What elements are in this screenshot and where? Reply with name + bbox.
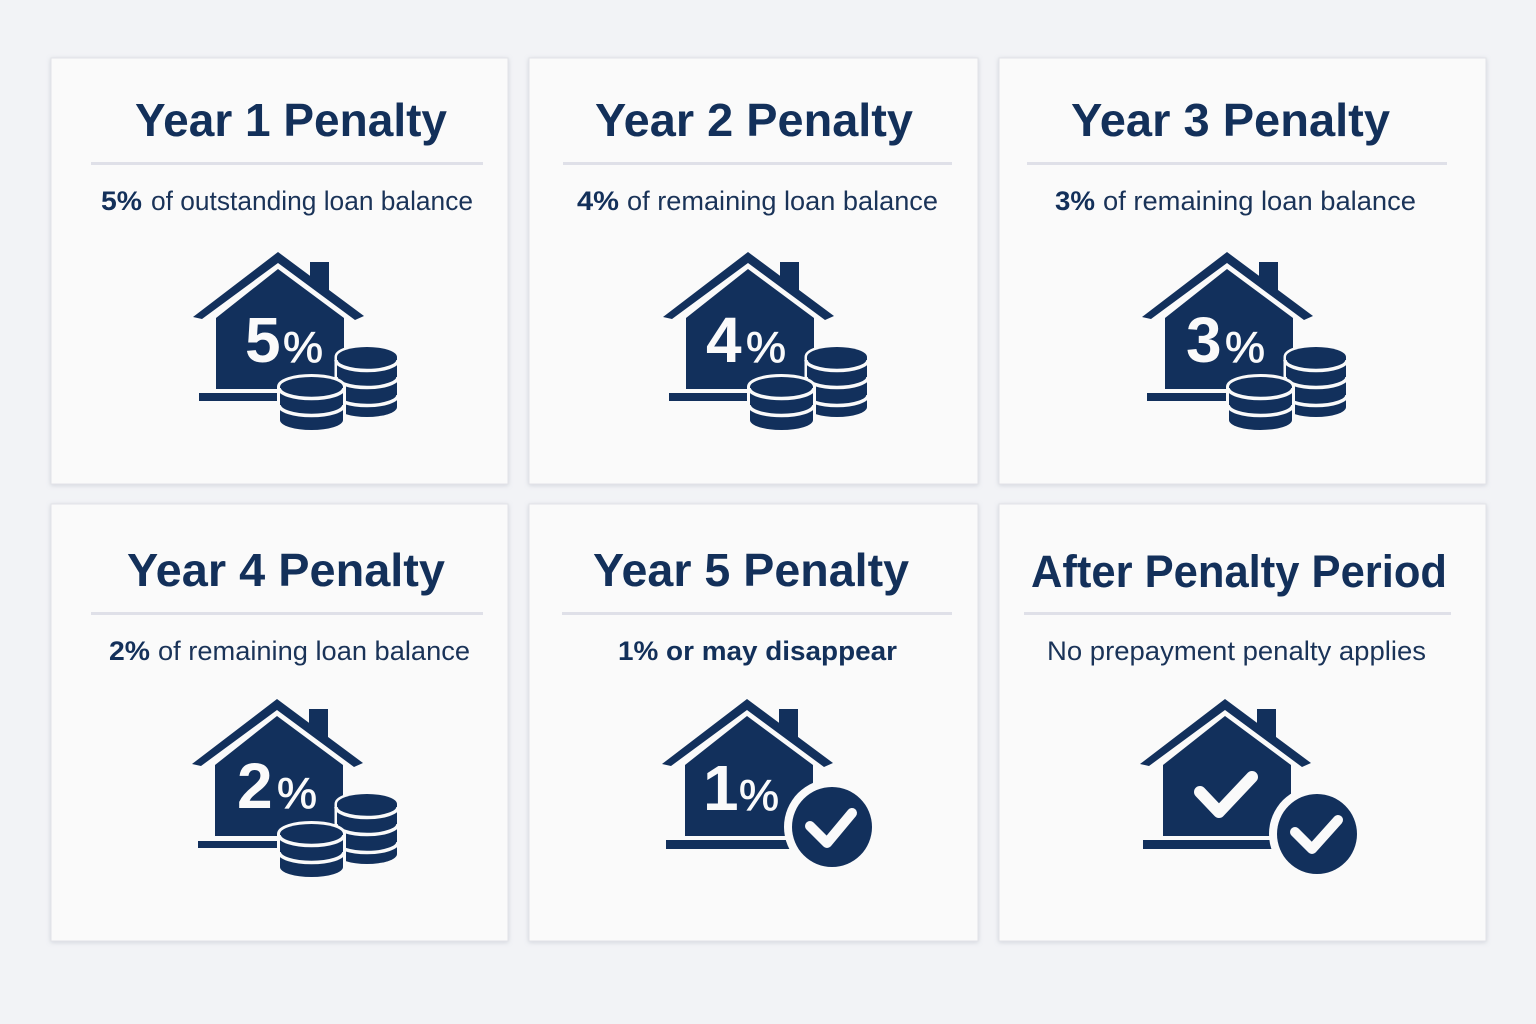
panel: year 1 penalty <box>51 58 508 484</box>
text: year 4 rate: 2% <box>109 636 150 666</box>
panel: year 3 penalty <box>999 58 1486 484</box>
icon: house with 1% and check badge: 1 <box>703 752 739 824</box>
heading: year 3: Year 3 Penalty <box>1071 94 1390 146</box>
icon: house with 2% and coins: 2 <box>237 750 273 822</box>
heading: after penalty period: After Penalty Period <box>1031 546 1447 597</box>
icon: house with 2% and coins: % <box>277 769 317 818</box>
icon: house with 5% and coins <box>193 252 398 430</box>
heading: year 5: Year 5 Penalty <box>593 544 909 596</box>
text: year 2 rate: of remaining loan balance <box>627 186 938 216</box>
icon: house with 5% and coins: 5 <box>245 304 281 376</box>
heading: year 2: Year 2 Penalty <box>595 94 913 146</box>
icon: house with 1% and check badge: % <box>739 771 779 820</box>
text: year 4 rate: of remaining loan balance <box>158 636 470 666</box>
icon: house with checks <box>1140 699 1365 882</box>
panel: year 4 penalty <box>51 504 508 941</box>
text: no penalty: No prepayment penalty applies <box>1047 636 1426 666</box>
text: year 1 rate: 5% <box>101 186 142 216</box>
heading: year 1: Year 1 Penalty <box>135 94 447 146</box>
text: year 3 rate: of remaining loan balance <box>1103 186 1416 216</box>
icon: house with 5% and coins: % <box>283 323 323 372</box>
text: year 1 rate: of outstanding loan balance <box>151 186 473 216</box>
text: year 3 rate: 3% <box>1055 186 1095 216</box>
icon: house with 3% and coins <box>1142 252 1347 430</box>
panel: after penalty period <box>999 504 1486 941</box>
text: year 2 rate: 4% <box>577 186 619 216</box>
panel: year 2 penalty <box>529 58 978 484</box>
heading: year 4: Year 4 Penalty <box>127 544 445 596</box>
text: year 5 rate: 1% or may disappear <box>618 636 898 666</box>
icon: house with 3% and coins: 3 <box>1186 304 1222 376</box>
icon: house with 4% and coins <box>663 252 868 430</box>
icon: house with 2% and coins <box>192 699 398 877</box>
icon: house with 1% and check badge <box>662 699 880 875</box>
panel: year 5 penalty <box>529 504 978 941</box>
icon: house with 4% and coins: 4 <box>706 304 742 376</box>
icon: house with 4% and coins: % <box>746 323 786 372</box>
icon: house with 3% and coins: % <box>1225 323 1265 372</box>
